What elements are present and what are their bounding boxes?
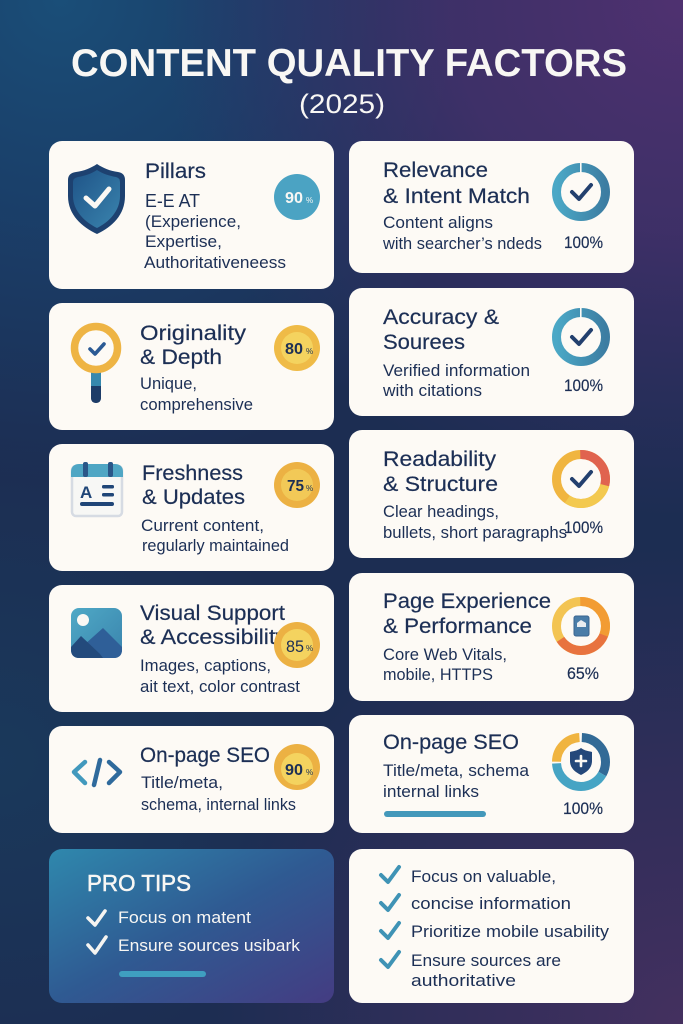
text block: comprehensive [140,395,253,414]
badge: 90%: 90 [285,190,303,207]
heading: Accuracy & [383,305,499,329]
text block [383,761,530,801]
text block [382,361,530,400]
heading: & Structure [383,472,498,496]
donut: 65% [556,602,606,683]
panel: page experience and performance [349,573,634,701]
badge: 90%: % [306,768,313,777]
text block: with searcher’s ndeds [382,234,542,253]
panel: relevance and intent match [349,141,634,273]
heading [140,321,246,369]
donut: 100%: 100% [564,233,603,252]
icon: calendar: A [80,483,92,502]
badge: 90% [274,174,320,220]
heading: Pillars [145,159,206,183]
icon: calendar [71,462,123,516]
badge: 85%: 85 [286,637,304,656]
text block [141,516,289,555]
heading: Relevance [383,158,488,182]
text block [144,191,286,272]
text block: schema, internal links [141,795,296,814]
text block: with citations [382,381,482,400]
title: CONTENT QUALITY FACTORS [71,42,627,85]
tip: Ensure sources usibark [118,936,301,955]
text block [382,213,542,253]
donut: 65%: 65% [567,664,599,683]
heading [140,601,287,649]
title [71,42,627,119]
heading [383,447,498,496]
panel: pro tips [49,849,334,1003]
heading: On-page SEO [383,730,519,754]
text block: Unique, [140,374,197,393]
text block: Title/meta, schema [383,761,530,780]
title: (2025) [299,89,385,119]
progress bar [119,971,206,977]
text block: Authoritativeneess [144,253,286,272]
badge: 85% [274,622,320,668]
checklist item: Focus on valuable, [411,867,556,886]
text block: Clear headings, [383,502,499,521]
panel: checklist [349,849,634,1003]
heading: & Intent Match [383,184,530,208]
panel: on-page SEO left [49,726,334,833]
text block: E-E AT [145,191,200,211]
checklist item: Prioritize mobile usability [411,922,610,941]
text block: Current content, [141,516,264,535]
badge: 85%: % [306,644,313,653]
badge: 75%: % [306,484,313,493]
checklist item: concise information [411,894,571,913]
badge: 90%: 90 [285,762,303,779]
text block [140,374,253,414]
text block: Expertise, [145,232,222,251]
heading [383,158,530,208]
heading: & Performance [383,614,532,638]
donut: 100% [556,307,606,395]
text block [383,645,507,684]
heading: & Depth [140,345,222,369]
panel: visual support and accessibility [49,585,334,712]
text block: Images, captions, [140,656,271,675]
badge: 80% [274,325,320,371]
heading: On-page SEO [140,743,270,767]
checklist item: Ensure sources are [411,951,561,970]
icon: magnifier [74,326,118,403]
heading: Readability [383,447,496,471]
badge: 80%: 80 [285,341,303,358]
panel: pillars E-E-AT [49,141,334,289]
text block: Core Web Vitals, [383,645,507,664]
heading: Freshness [142,461,243,485]
progress bar [384,811,486,817]
heading [142,461,245,509]
donut: 100% [556,162,606,252]
badge: 90%: % [306,196,313,205]
heading [383,305,499,354]
heading: Sourees [383,330,465,354]
text block: regularly maintained [142,536,289,555]
tip: Focus on matent [118,908,251,927]
text block: Title/meta, [141,773,223,792]
badge: 75% [274,462,320,508]
badge: 90% [274,744,320,790]
icon: code brackets [74,760,120,785]
heading: & Updates [142,485,245,509]
badge: 80%: % [306,347,313,356]
text block: bullets, short paragraphs [383,523,567,542]
heading: Originality [140,321,246,345]
text block: internal links [383,782,479,801]
panel: accuracy and sources [349,288,634,416]
text block [383,502,567,542]
panel: readability and structure [349,430,634,558]
text block: Verified information [383,361,530,380]
icon: image [71,608,122,658]
heading: Page Experience [383,589,551,613]
heading: Visual Support [140,601,285,625]
text block [140,656,300,696]
panel: on-page SEO right [349,715,634,833]
donut: 100%: 100% [564,518,603,537]
panel: freshness and updates [49,444,334,571]
badge: 75%: 75 [287,478,304,495]
heading [383,589,551,638]
checklist item: authoritative [411,971,516,990]
donut: 100% [556,738,606,818]
donut: 100% [556,454,606,537]
text block: Content aligns [383,213,493,232]
heading: & Accessibility [140,625,287,649]
text block: ait text, color contrast [140,677,300,696]
donut: 100%: 100% [563,799,603,818]
icon: shield [68,164,125,234]
text block: mobile, HTTPS [383,665,493,684]
panel: originality and depth [49,303,334,430]
checklist item [381,951,561,990]
text block: (Experience, [145,212,241,231]
text block [141,773,296,814]
donut: 100%: 100% [564,376,603,395]
heading: PRO TIPS [87,870,191,896]
